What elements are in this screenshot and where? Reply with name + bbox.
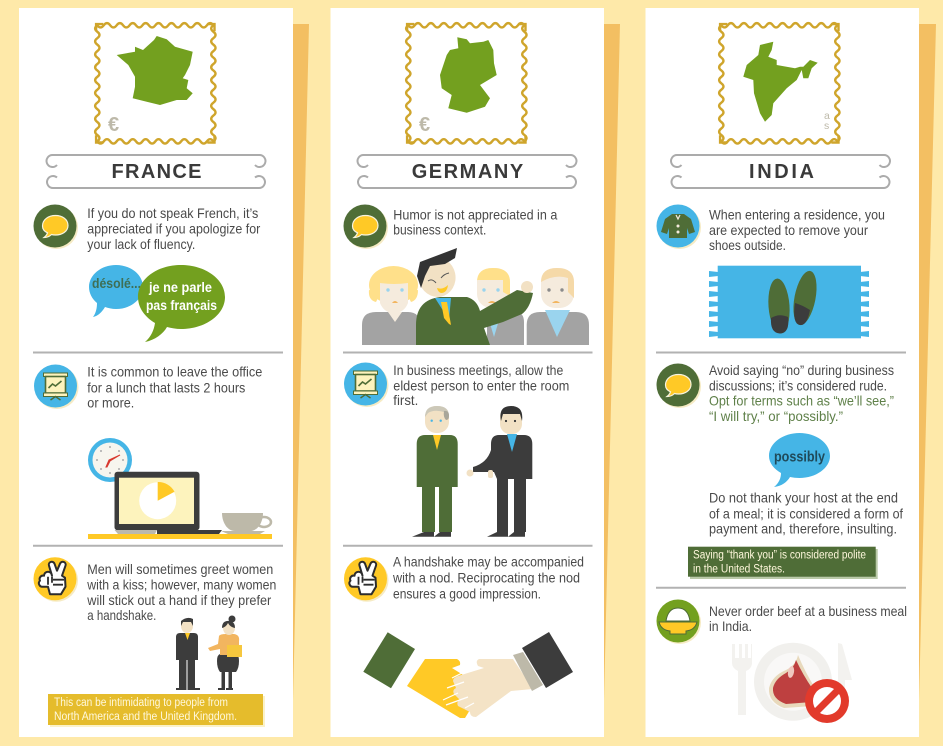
text: do not thank your host: payment and, therefore, insulting. bbox=[709, 520, 897, 536]
heading banner: India bbox=[671, 155, 890, 188]
heading banner: France bbox=[47, 155, 265, 188]
text: never order beef: in India. bbox=[709, 618, 752, 634]
fork bbox=[732, 644, 752, 715]
text: do not thank your host bbox=[709, 489, 903, 536]
text: removing shoes: shoes outside. bbox=[709, 237, 786, 253]
laptop bbox=[114, 472, 222, 534]
icon: shirt bbox=[656, 204, 701, 249]
illustration: rug with shoes bbox=[709, 266, 869, 338]
stamp: India map: s bbox=[824, 120, 829, 132]
text: greeting with a kiss: Men will sometimes greet women bbox=[87, 561, 273, 577]
plate bbox=[754, 643, 832, 721]
icon: peace hand bbox=[344, 557, 388, 602]
text: never order beef: Never order beef at a business meal bbox=[709, 603, 907, 619]
colleague: blond man bbox=[477, 268, 524, 345]
steak bbox=[769, 655, 815, 708]
panel shadow bbox=[919, 24, 936, 700]
illustration: handshake bbox=[363, 632, 573, 718]
stamp: France map bbox=[95, 23, 216, 144]
panel: France bbox=[19, 8, 309, 737]
icon: presentation board bbox=[344, 362, 388, 407]
text: handshake and nod bbox=[392, 554, 584, 601]
stamp: India map bbox=[719, 23, 840, 144]
text: speaking French bbox=[87, 205, 261, 252]
figure: older man in green suit bbox=[412, 406, 458, 537]
callout: intimidating bbox=[48, 694, 265, 727]
text: speaking French: appreciated if you apologize for bbox=[87, 220, 261, 236]
text: long lunch: for a lunch that lasts 2 hours bbox=[87, 379, 245, 395]
text: speaking French: If you do not speak French, it’s bbox=[87, 205, 258, 221]
panel card bbox=[330, 8, 604, 737]
text: humor: Humor is not appreciated in a bbox=[393, 206, 557, 222]
text: speaking French: your lack of fluency. bbox=[87, 236, 195, 252]
text: greeting with a kiss: a handshake. bbox=[87, 607, 156, 623]
panel shadow bbox=[293, 24, 309, 700]
text: eldest person first: eldest person to enter the room bbox=[393, 378, 569, 394]
knife bbox=[838, 643, 852, 700]
icon: speech bubble bbox=[344, 204, 388, 249]
text: do not thank your host: Do not thank your host at the end bbox=[709, 489, 898, 505]
heading banner: France: FRANCE bbox=[112, 161, 202, 183]
coffee cup bbox=[221, 513, 271, 534]
speech bubble: je ne parle pas français: je ne parle bbox=[148, 279, 212, 295]
figure: woman bbox=[208, 616, 242, 690]
stamp: Germany map: € bbox=[419, 114, 430, 136]
speech bubble: je ne parle pas français bbox=[138, 265, 225, 342]
panel card bbox=[646, 8, 919, 737]
stamp: Germany map bbox=[406, 23, 527, 144]
text: removing shoes: When entering a residence, you bbox=[709, 206, 885, 222]
panel: India bbox=[646, 8, 936, 737]
text: avoid saying no: “I will try,” or “possibly.” bbox=[709, 408, 843, 424]
text: handshake and nod: with a nod. Reciprocating the nod bbox=[392, 570, 580, 586]
heading banner: Germany bbox=[358, 155, 576, 188]
panel shadow bbox=[604, 24, 620, 700]
text: long lunch: It is common to leave the office bbox=[87, 364, 262, 380]
icon: bowl bbox=[656, 600, 701, 644]
callout: thank you: Saying “thank you” is considered polite bbox=[693, 550, 866, 562]
text: do not thank your host: of a meal; it is considered a form of bbox=[709, 505, 903, 521]
heading banner: India: INDIA bbox=[749, 161, 814, 183]
no sign bbox=[805, 679, 849, 723]
illustration: steak with no sign bbox=[732, 643, 852, 723]
colleague: older man bbox=[527, 268, 589, 345]
panel card bbox=[19, 8, 293, 737]
speech bubble: désolé: désolé... bbox=[92, 276, 141, 291]
text: avoid saying no: Opt for terms such as “we’ll see,” bbox=[709, 393, 894, 409]
table bbox=[88, 534, 272, 539]
text: handshake and nod: ensures a good impression. bbox=[393, 585, 541, 601]
callout: intimidating: This can be intimidating to people from bbox=[54, 697, 228, 709]
icon: peace hand bbox=[34, 557, 78, 602]
text: handshake and nod: A handshake may be accompanied bbox=[393, 554, 584, 570]
text: eldest person first bbox=[393, 362, 569, 408]
text: removing shoes bbox=[709, 206, 885, 253]
text: long lunch: or more. bbox=[87, 394, 134, 410]
laughing man in green suit bbox=[415, 248, 533, 345]
text: avoid saying no: Avoid saying “no” during business bbox=[709, 362, 894, 378]
icon: presentation board bbox=[34, 364, 78, 409]
callout: intimidating: North America and the United Kingdom. bbox=[54, 711, 237, 723]
text: eldest person first: first. bbox=[393, 392, 418, 408]
text: long lunch bbox=[87, 364, 262, 410]
colleague: blonde woman bbox=[362, 266, 420, 345]
text: humor bbox=[393, 206, 557, 237]
figure: young man in dark suit bbox=[466, 406, 532, 537]
figure: man bbox=[176, 618, 200, 690]
text: removing shoes: are expected to remove your bbox=[709, 222, 868, 238]
text: avoid saying no: discussions; it’s considered rude. bbox=[709, 378, 887, 394]
panel: Germany bbox=[330, 8, 620, 737]
speech bubble: désolé bbox=[89, 265, 143, 317]
callout: thank you bbox=[688, 547, 878, 579]
speech bubble: possibly bbox=[769, 433, 830, 487]
icon: speech bubble bbox=[656, 364, 701, 408]
stamp: India map: a bbox=[824, 110, 830, 122]
speech bubble: possibly: possibly bbox=[774, 449, 826, 466]
text: avoid saying no bbox=[709, 362, 894, 424]
text: eldest person first: In business meetings, allow the bbox=[393, 362, 563, 378]
text: greeting with a kiss: will stick out a hand if they prefer bbox=[86, 592, 272, 608]
text: humor: business context. bbox=[393, 221, 486, 237]
heading banner: Germany: GERMANY bbox=[412, 161, 524, 183]
callout: thank you: in the United States. bbox=[693, 564, 785, 576]
illustration: colleagues and joking man bbox=[362, 248, 589, 345]
clock bbox=[88, 438, 132, 482]
illustration: clock, laptop and cup bbox=[88, 438, 272, 539]
text: greeting with a kiss: with a kiss; however, many women bbox=[86, 576, 276, 592]
stamp: France map: € bbox=[108, 114, 119, 136]
text: greeting with a kiss bbox=[86, 561, 276, 623]
text: never order beef bbox=[709, 603, 907, 634]
icon: speech bubble bbox=[34, 204, 78, 249]
speech bubble: je ne parle pas français: pas français bbox=[146, 297, 217, 313]
